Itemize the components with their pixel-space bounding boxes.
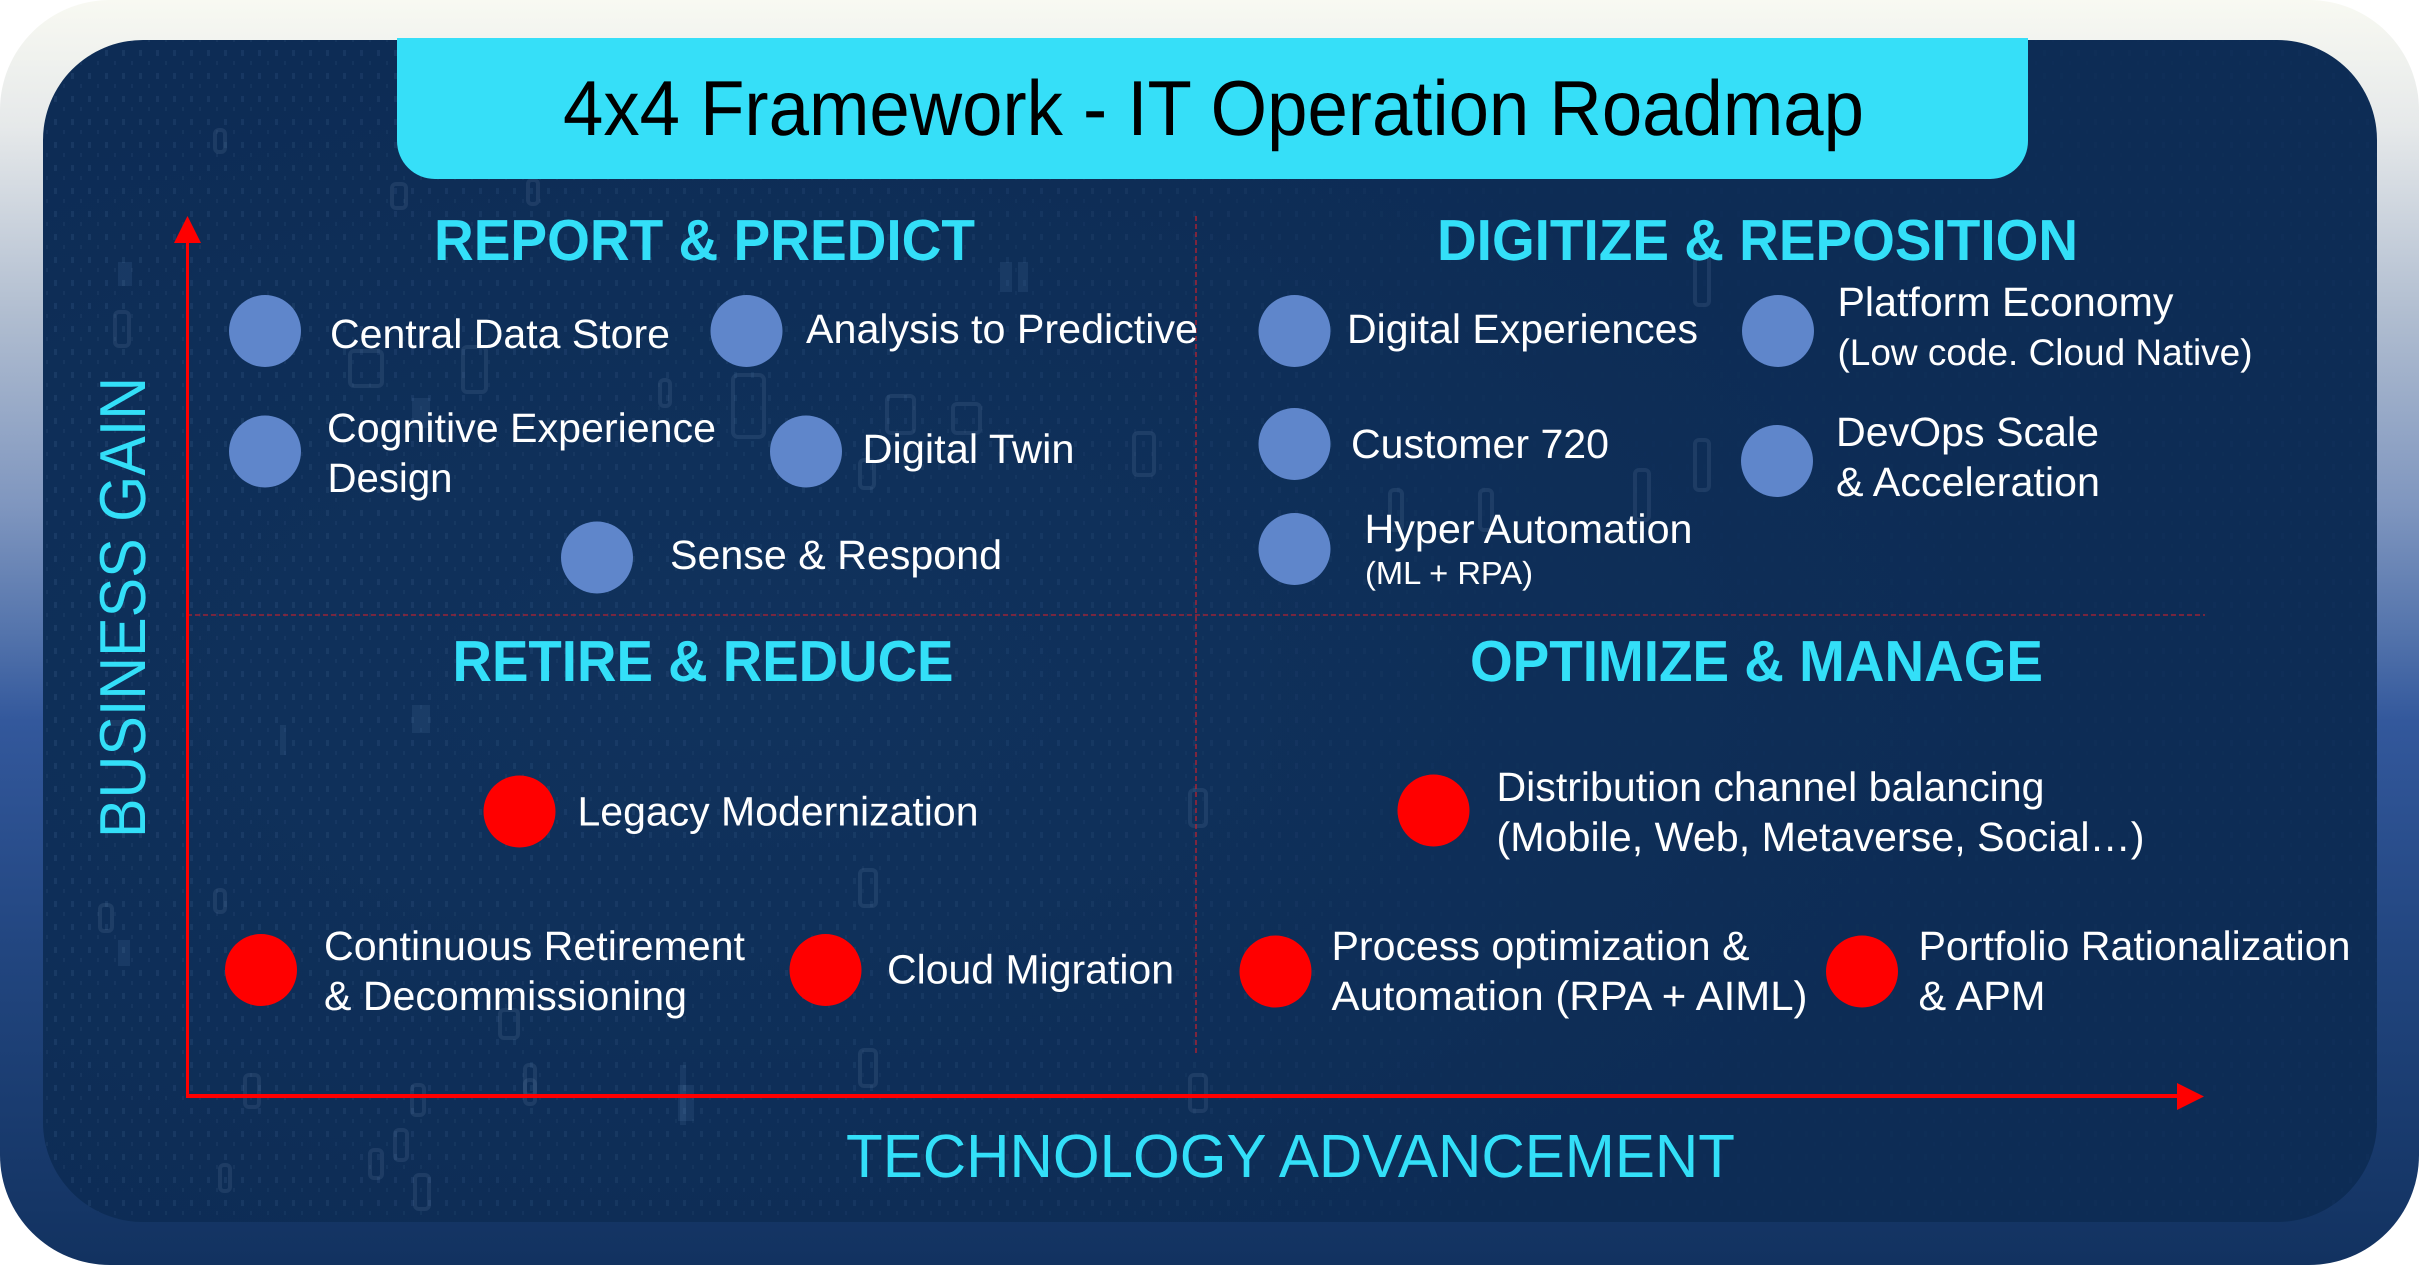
item: analysis to predictive: [710, 295, 1198, 367]
item: legacy modernization: Legacy Modernization: [578, 788, 978, 834]
heading: retire and reduce: RETIRE & REDUCE: [452, 629, 954, 694]
axis: technology advancement arrow: [186, 1083, 2204, 1110]
item: digital experiences: [1258, 295, 1698, 367]
item: distribution channel balancing: Distribution channel balancing: [1496, 764, 2044, 810]
item: platform economy: [1742, 279, 2252, 373]
item: hyper automation: Hyper Automation: [1364, 506, 1692, 552]
item: digital twin: [770, 416, 1074, 488]
item: platform economy: Platform Economy: [1838, 279, 2174, 325]
item: legacy modernization: [484, 776, 978, 848]
item: continuous retirement and decommissioning: & Decommissioning: [324, 973, 687, 1019]
axis: business gain arrow: [174, 216, 201, 1098]
item: sense and respond: Sense & Respond: [670, 532, 1002, 578]
item: cloud migration: Cloud Migration: [887, 946, 1174, 992]
item: cloud migration: [790, 934, 1174, 1006]
title text: 4x4 Framework - IT Operation Roadmap: [563, 64, 1864, 152]
heading: report and predict: REPORT & PREDICT: [434, 208, 975, 273]
item: distribution channel balancing: (Mobile, Web, Metaverse, Social…): [1496, 814, 2144, 860]
item: portfolio rationalization and apm: Portfolio Rationalization: [1918, 923, 2350, 969]
item: sense and respond: [561, 522, 1002, 594]
item: portfolio rationalization and apm: & APM: [1918, 973, 2046, 1019]
panel: retire and reduce: [225, 629, 1174, 1019]
item: process optimization and automation: Automation (RPA + AIML): [1332, 973, 1808, 1019]
panel: digitize and reposition: [1258, 208, 2252, 591]
item: distribution channel balancing: [1398, 764, 2144, 860]
item: digital twin: Digital Twin: [862, 426, 1074, 472]
item: process optimization and automation: Process optimization &: [1332, 923, 1750, 969]
item: hyper automation: [1258, 506, 1692, 591]
item: central data store: Central Data Store: [330, 311, 670, 357]
item: cognitive experience design: Design: [328, 455, 452, 501]
item: digital experiences: Digital Experiences: [1347, 306, 1698, 352]
item: cognitive experience design: [229, 405, 716, 501]
axis label: technology advancement: TECHNOLOGY ADVANCEMENT: [846, 1122, 1735, 1190]
item: platform economy: (Low code. Cloud Native): [1838, 332, 2252, 373]
item: portfolio rationalization and apm: [1826, 923, 2350, 1019]
axis label: business gain: BUSINESS GAIN: [86, 377, 159, 838]
item: central data store: [229, 295, 670, 367]
heading: digitize and reposition: DIGITIZE & REPOSITION: [1437, 208, 2078, 273]
heading: optimize and manage: OPTIMIZE & MANAGE: [1470, 629, 2043, 694]
item: devops scale and acceleration: [1741, 409, 2100, 505]
item: customer 720: Customer 720: [1351, 421, 1609, 467]
item: devops scale and acceleration: DevOps Scale: [1836, 409, 2099, 455]
item: hyper automation: (ML + RPA): [1365, 555, 1533, 591]
quadrant divider lines: [187, 216, 2205, 1053]
item: continuous retirement and decommissioning: [225, 923, 746, 1019]
item: continuous retirement and decommissioning: Continuous Retirement: [324, 923, 746, 969]
panel: report and predict: [229, 208, 1198, 594]
item: cognitive experience design: Cognitive Experience: [327, 405, 716, 451]
item: devops scale and acceleration: & Acceleration: [1836, 459, 2100, 505]
item: analysis to predictive: Analysis to Predictive: [806, 306, 1198, 352]
panel: optimize and manage: [1240, 629, 2350, 1019]
item: process optimization and automation: [1240, 923, 1808, 1019]
title bar: [397, 38, 2028, 179]
item: customer 720: [1258, 408, 1609, 480]
